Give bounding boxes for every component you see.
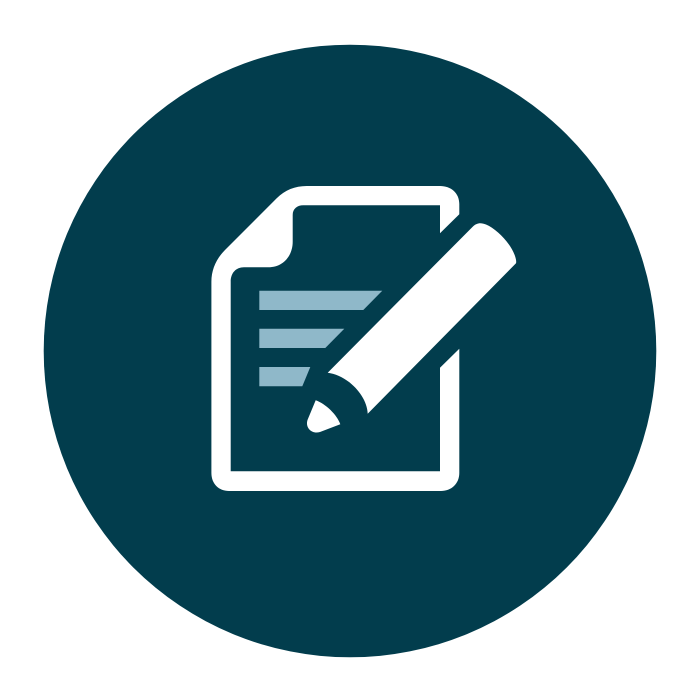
- pencil body: [328, 223, 516, 414]
- icon: pencil: [307, 223, 516, 433]
- line 2: [259, 329, 344, 348]
- icon: document outline: [211, 186, 459, 491]
- background circle: [44, 45, 656, 657]
- line 3: [259, 367, 310, 386]
- line 1: [259, 291, 382, 310]
- pencil tip: [307, 400, 340, 433]
- text lines on document: [259, 291, 382, 386]
